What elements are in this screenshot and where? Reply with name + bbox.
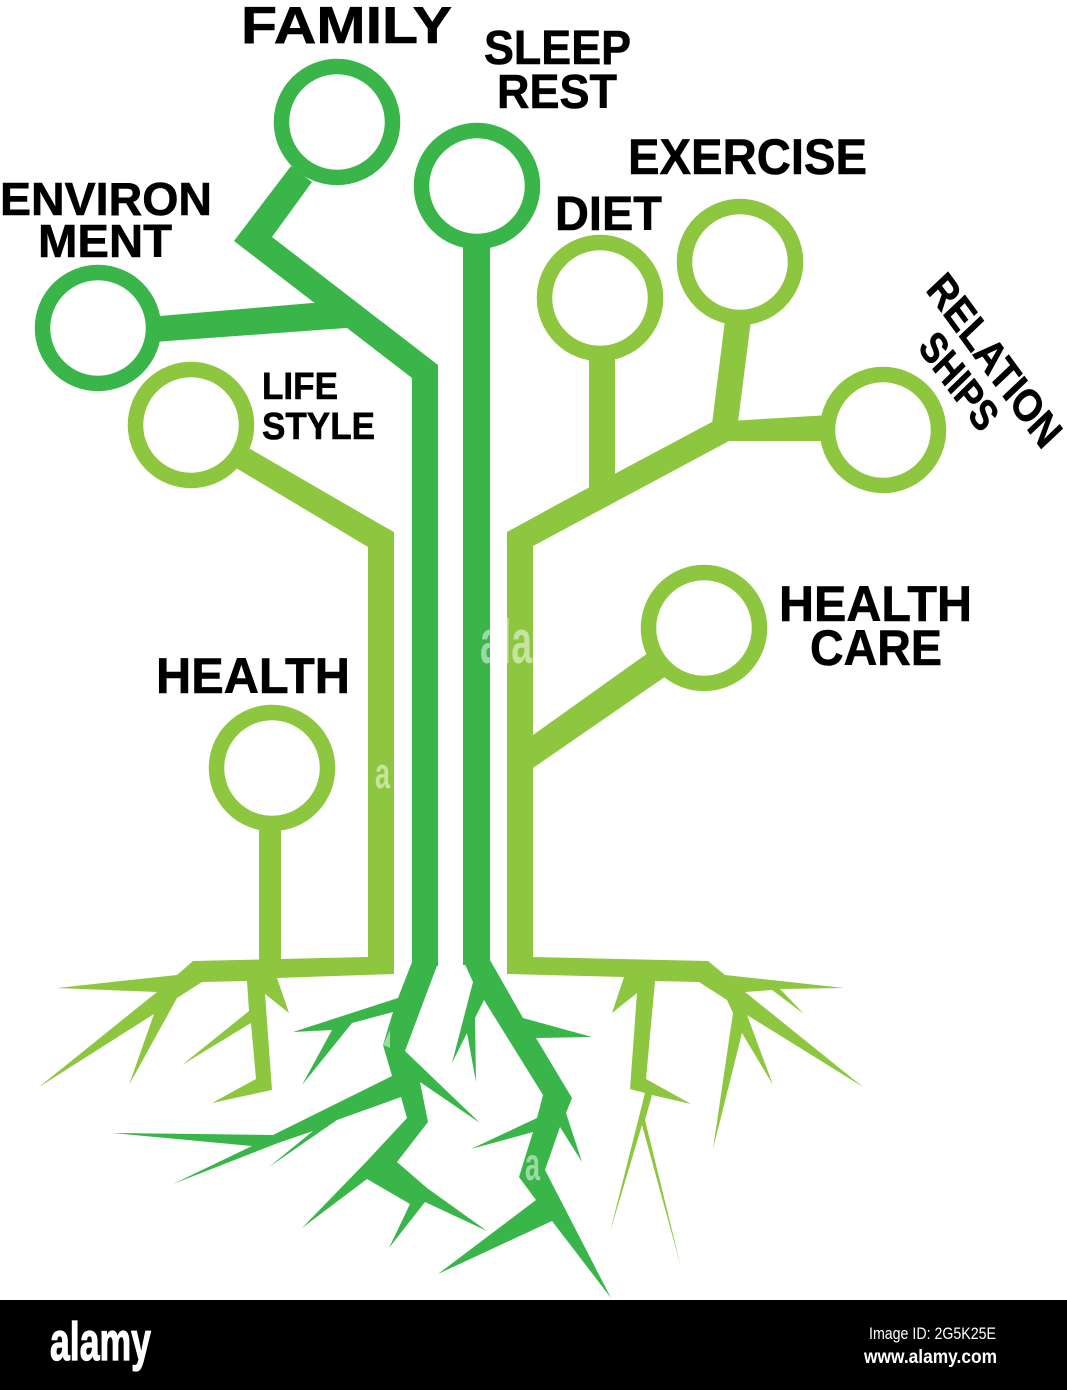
branch: environment bbox=[154, 303, 350, 342]
watermark traces: a bbox=[375, 749, 390, 798]
circle: relationships bbox=[828, 374, 938, 486]
label: sleep rest: SLEEP bbox=[484, 22, 631, 75]
circle: diet bbox=[544, 242, 656, 354]
circle: family bbox=[282, 66, 392, 178]
label: lifestyle: LIFE bbox=[262, 366, 338, 408]
circle: health care bbox=[648, 572, 760, 684]
label: health: HEALTH bbox=[156, 648, 350, 704]
roots: right light bbox=[507, 957, 863, 1267]
circle: environment bbox=[42, 272, 154, 384]
label: sleep rest: REST bbox=[497, 66, 617, 119]
branch: family and environment trunk bbox=[234, 166, 438, 966]
watermark traces: a bbox=[525, 1138, 540, 1190]
label: health care: CARE bbox=[810, 620, 942, 676]
label: exercise: EXERCISE bbox=[628, 129, 867, 185]
label: environment: ENVIRON bbox=[0, 173, 212, 225]
watermark traces: ala bbox=[480, 608, 532, 677]
footer bar bbox=[0, 1300, 1067, 1390]
label: environment bbox=[0, 173, 212, 267]
circle: lifestyle bbox=[136, 370, 246, 480]
stem: health bbox=[259, 828, 281, 963]
dark green tree: family, environment, sleep bbox=[42, 66, 611, 1298]
stem: exercise bbox=[712, 320, 751, 424]
circle: sleep rest bbox=[422, 130, 532, 242]
label: health care bbox=[779, 576, 972, 676]
branch: lifestyle and left trunk bbox=[226, 443, 394, 974]
circle: health bbox=[216, 712, 328, 824]
light green tree: lifestyle, health, diet, exercise, relationships, health care bbox=[39, 206, 938, 1267]
roots: centre dark bbox=[438, 960, 611, 1298]
circle: exercise bbox=[684, 206, 796, 318]
label: relationships: SHIPS bbox=[910, 323, 1007, 441]
label: relationships: RELATION bbox=[918, 264, 1067, 458]
stem: diet bbox=[589, 350, 615, 490]
footer logo: alamy bbox=[50, 1312, 151, 1372]
watermark traces bbox=[375, 608, 540, 1190]
label: lifestyle: STYLE bbox=[262, 406, 375, 448]
label: environment: MENT bbox=[38, 215, 172, 267]
trunk: sleep rest bbox=[463, 235, 490, 965]
image id: Image ID: 2G5K25E bbox=[869, 1324, 996, 1343]
label: lifestyle bbox=[262, 366, 375, 448]
roots: left light bbox=[39, 957, 394, 1103]
branch: right trunk bbox=[507, 415, 830, 966]
website: www.alamy.com bbox=[863, 1347, 997, 1368]
roots: left dark bbox=[112, 962, 487, 1248]
label: diet: DIET bbox=[555, 188, 662, 241]
branch: health care bbox=[533, 648, 672, 768]
label: sleep rest bbox=[484, 22, 631, 119]
label: health care: HEALTH bbox=[779, 576, 972, 632]
